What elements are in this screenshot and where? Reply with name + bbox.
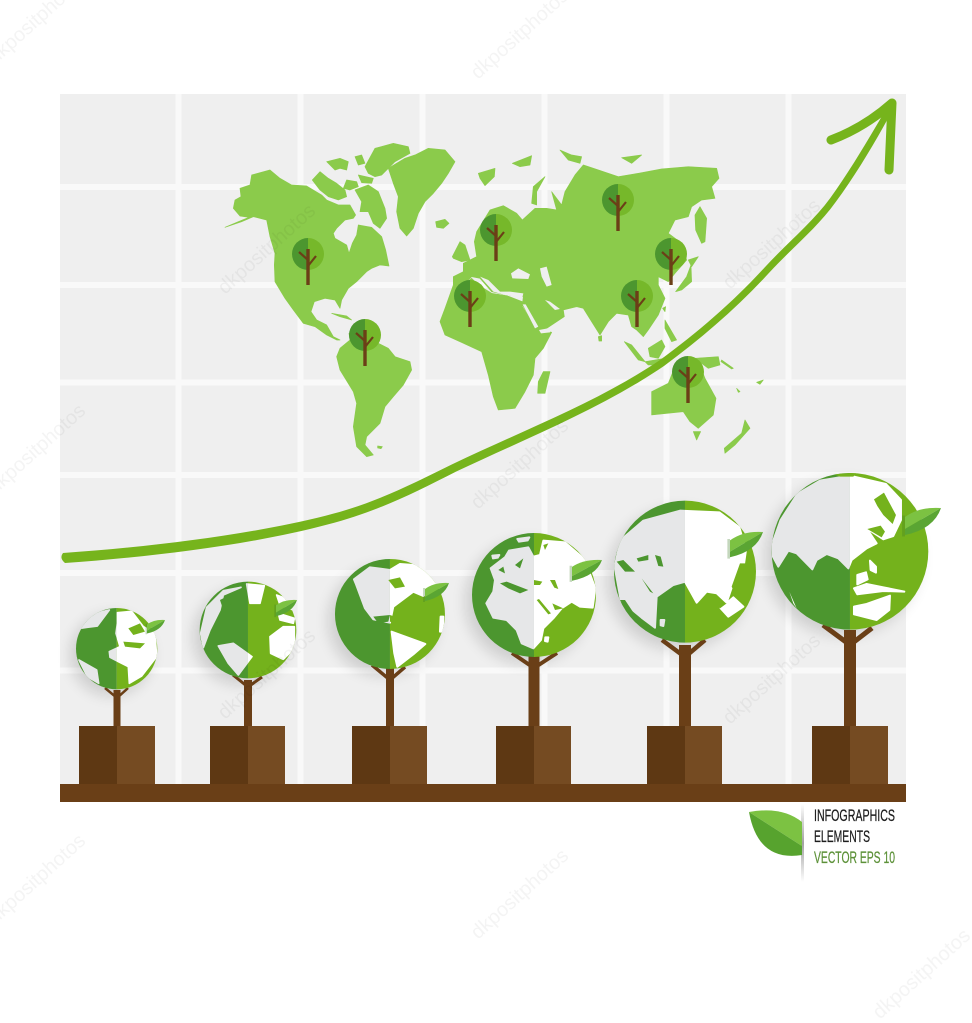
globe — [470, 530, 598, 660]
leaf — [146, 620, 165, 634]
caption text — [814, 806, 895, 867]
caption text: INFOGRAPHICS — [814, 806, 895, 825]
trunk — [105, 688, 128, 726]
shadow — [765, 480, 921, 636]
eurasia africa australia — [440, 150, 763, 453]
trunk — [662, 640, 705, 726]
trunk — [823, 625, 872, 726]
leaf — [727, 532, 763, 559]
shadow — [328, 566, 438, 676]
plant 2 — [193, 577, 299, 784]
pot — [210, 726, 285, 784]
tree marker: europe — [480, 214, 512, 261]
growth arrow — [61, 103, 895, 563]
stock watermarks: dkpositphotos — [214, 200, 320, 299]
map tree markers — [292, 184, 704, 403]
plant 5 — [607, 498, 763, 784]
inland seas — [480, 267, 560, 333]
caption block — [749, 804, 895, 882]
panel: grey grid background — [60, 94, 906, 784]
pot — [812, 726, 888, 784]
globe — [76, 608, 158, 690]
tree marker: east asia — [655, 238, 687, 285]
leaf — [902, 508, 941, 536]
plant 6 — [765, 470, 941, 784]
pot — [647, 726, 722, 784]
leaf — [423, 583, 449, 602]
leaf — [570, 560, 602, 582]
tree marker: north africa — [454, 280, 486, 327]
globe — [200, 582, 296, 678]
plant 3 — [328, 557, 449, 784]
world map — [225, 143, 763, 457]
shadow — [193, 589, 289, 685]
globe — [612, 498, 758, 645]
soil bar — [60, 784, 906, 802]
arrow shaft — [61, 104, 895, 563]
shadow — [70, 614, 152, 696]
stock watermarks: dkpositphotos — [719, 630, 825, 729]
americas and greenland — [225, 143, 455, 457]
stock watermarks: dkpositphotos — [719, 195, 825, 294]
stock watermarks: dkpositphotos — [214, 625, 320, 724]
fold shadow — [801, 804, 804, 882]
tree marker: china — [621, 280, 653, 327]
tree marker: south america — [349, 319, 381, 366]
shadow — [607, 508, 749, 650]
arrow head — [831, 103, 892, 170]
caption text: VECTOR EPS 10 — [814, 848, 895, 867]
globe — [768, 470, 932, 633]
caption text: ELEMENTS — [814, 827, 870, 846]
tree marker: russia — [602, 184, 634, 231]
plant 4 — [465, 530, 602, 784]
trunk — [233, 675, 262, 726]
trunk — [512, 653, 557, 726]
icon: caption leaf — [749, 810, 802, 856]
globe — [333, 557, 447, 672]
shadow — [465, 540, 589, 664]
pot — [496, 726, 571, 784]
tree marker: north america — [292, 238, 324, 285]
stock watermarks: dkpositphotos — [467, 845, 573, 944]
plant 1 — [70, 607, 165, 784]
pot — [79, 726, 155, 784]
pot — [352, 726, 427, 784]
leaf — [274, 600, 297, 617]
stock watermarks: dkpositphotos — [467, 415, 573, 514]
tree marker: australia — [672, 356, 704, 403]
trunk — [372, 665, 405, 726]
